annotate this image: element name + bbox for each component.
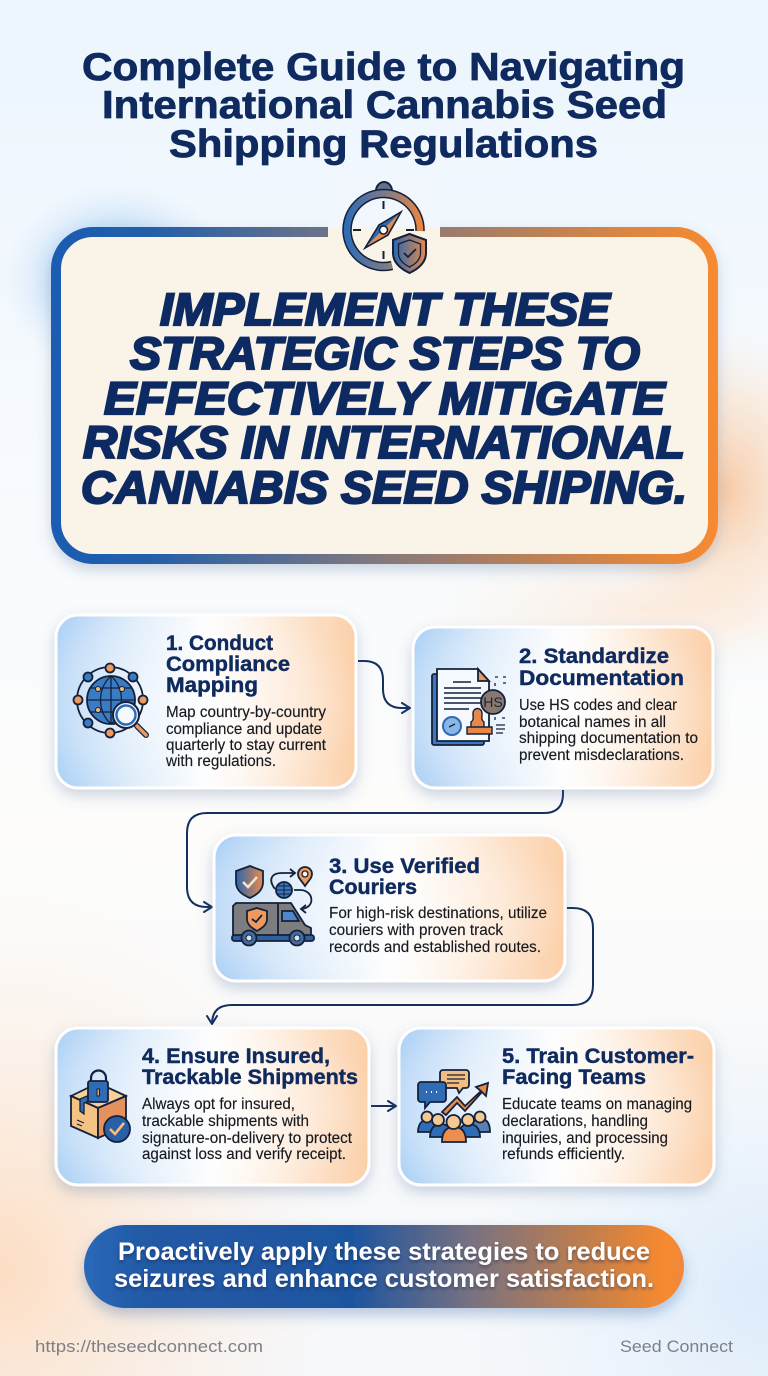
- title: Complete Guide to Navigating: [82, 46, 685, 89]
- key message text: [81, 284, 687, 513]
- icon: document with HS stamp: [432, 669, 506, 745]
- icon: team with growth arrow: [418, 1070, 490, 1142]
- step 4 heading: [142, 1044, 358, 1089]
- icon: courier van: [232, 866, 314, 946]
- step 3 heading: [329, 854, 480, 899]
- step 3 text: couriers with proven track: [329, 922, 504, 939]
- step 5 text: declarations, handling: [502, 1113, 648, 1130]
- step 3 text: For high-risk destinations, utilize: [329, 905, 547, 922]
- icon: globe network: [74, 664, 148, 738]
- icon: compass with shield: [347, 182, 426, 273]
- panel: step 2: [413, 627, 713, 788]
- step 5 text: Educate teams on managing: [502, 1096, 692, 1113]
- key message text: EFFECTIVELY MITIGATE: [104, 373, 667, 424]
- step 5 text: refunds efficiently.: [502, 1146, 625, 1163]
- step 1 text: with regulations.: [165, 753, 276, 770]
- step 3 heading: 3. Use Verified: [329, 854, 480, 878]
- step 1 text: Map country-by-country: [166, 704, 326, 721]
- step 1 heading: Mapping: [166, 673, 258, 697]
- step 4 text: trackable shipments with: [142, 1113, 309, 1130]
- step 4 text: signature-on-delivery to protect: [142, 1130, 353, 1147]
- callout: closing statement: [84, 1225, 684, 1308]
- panel: step 4: [56, 1028, 369, 1185]
- step 2 heading: Documentation: [519, 666, 684, 690]
- step 2 text: prevent misdeclarations.: [519, 747, 684, 764]
- step 4 text: against loss and verify receipt.: [142, 1146, 346, 1163]
- title: [82, 46, 685, 166]
- step 1 text: compliance and update: [166, 721, 322, 738]
- footer: website: https://theseedconnect.com: [35, 1337, 263, 1356]
- arrow: step 1 to 2: [358, 661, 410, 708]
- step 1 heading: [166, 631, 290, 697]
- arrow: step 4 to 5: [371, 1105, 396, 1107]
- step 4 heading: 4. Ensure Insured,: [142, 1044, 330, 1068]
- step 5 heading: 5. Train Customer-: [502, 1044, 694, 1068]
- panel: step 1: [56, 615, 356, 788]
- callout: closing statement: seizures and enhance customer satisfaction.: [114, 1265, 654, 1293]
- step 2 text: botanical names in all: [519, 714, 666, 731]
- step 5 heading: [502, 1044, 694, 1089]
- step 3 text: [329, 905, 547, 956]
- callout: closing statement: Proactively apply these strategies to reduce: [118, 1238, 650, 1266]
- icon: locked parcel: [71, 1070, 130, 1142]
- step 1 text: quarterly to stay current: [166, 737, 327, 754]
- key message text: CANNABIS SEED SHIPING.: [81, 462, 687, 513]
- panel: key message: [56, 180, 713, 559]
- step 5 heading: Facing Teams: [502, 1065, 646, 1089]
- step 2 text: Use HS codes and clear: [519, 697, 678, 714]
- step 2 heading: [519, 644, 684, 690]
- step 4 text: Always opt for insured,: [142, 1096, 295, 1113]
- arrow: step 2 to 3: [187, 790, 563, 907]
- step 5 text: inquiries, and processing: [502, 1130, 668, 1147]
- key message text: RISKS IN INTERNATIONAL: [83, 417, 685, 468]
- footer: brand: Seed Connect: [620, 1337, 733, 1356]
- step 5 text: [502, 1096, 692, 1163]
- key message text: IMPLEMENT THESE: [160, 284, 612, 335]
- step 4 heading: Trackable Shipments: [142, 1065, 358, 1089]
- key message text: STRATEGIC STEPS TO: [130, 328, 640, 379]
- icon: document with HS stamp: HS: [483, 694, 503, 710]
- panel: step 5: [399, 1028, 714, 1185]
- step 1 heading: 1. Conduct: [166, 631, 273, 655]
- title: International Cannabis Seed: [102, 84, 667, 127]
- step 1 heading: Compliance: [166, 652, 290, 676]
- arrow: step 3 to 4: [212, 908, 593, 1024]
- step 3 text: records and established routes.: [329, 939, 541, 956]
- panel: step 3: [214, 835, 565, 981]
- step 2 text: shipping documentation to: [519, 730, 698, 747]
- step 2 text: [519, 697, 698, 764]
- step 3 heading: Couriers: [329, 875, 417, 899]
- step 1 text: [165, 704, 327, 770]
- step 2 heading: 2. Standardize: [519, 644, 669, 668]
- step 4 text: [142, 1096, 353, 1163]
- title: Shipping Regulations: [169, 123, 598, 166]
